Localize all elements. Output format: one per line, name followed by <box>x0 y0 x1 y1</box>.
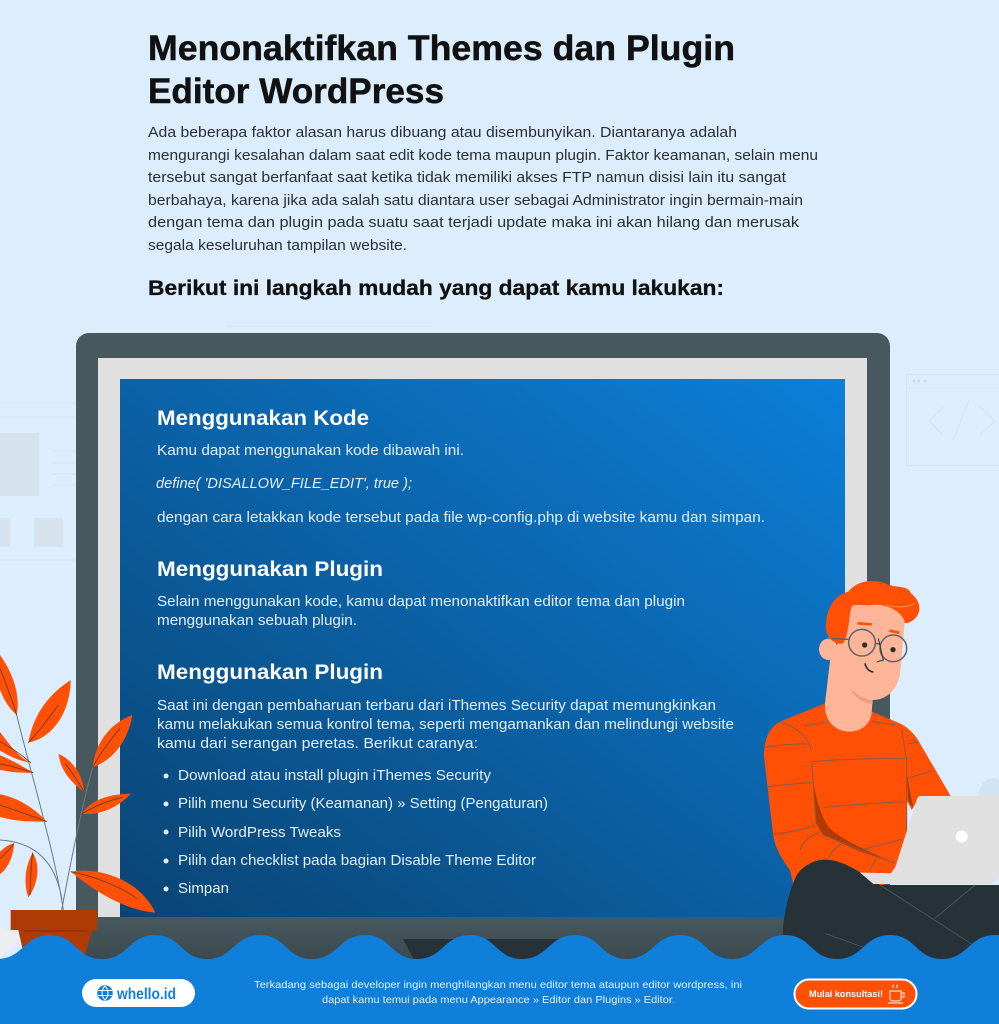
icon: globe <box>98 986 112 1000</box>
section: menggunakan plugin <box>157 558 685 629</box>
intro paragraph: mengurangi kesalahan dalam saat edit kode tema maupun plugin. Faktor keamanan, selain menu <box>148 148 818 164</box>
section: langkah plugin: Menggunakan Plugin <box>157 661 383 684</box>
logo pill <box>82 979 195 1007</box>
bullet list: Pilih WordPress Tweaks <box>178 825 341 841</box>
section: langkah plugin: kamu melakukan semua kontrol tema, seperti mengamankan dan melindungi website <box>157 717 734 733</box>
logo pill: whello.id <box>116 986 176 1003</box>
title <box>148 29 735 111</box>
bullet list <box>164 768 548 897</box>
leaf veins <box>0 668 137 898</box>
laptop <box>860 796 999 884</box>
bullet list: Pilih menu Security (Keamanan) » Setting (Pengaturan) <box>178 796 548 812</box>
monitor <box>76 333 890 967</box>
section: langkah plugin: Saat ini dengan pembaharuan terbaru dari iThemes Security dapat memungkinkan <box>157 698 716 714</box>
footer note <box>254 979 742 1006</box>
glasses and face details <box>832 603 915 672</box>
plant leaves <box>0 655 155 913</box>
background decoration: faint wireframe shapes <box>0 326 999 800</box>
illustration: plant <box>0 655 155 960</box>
section: menggunakan kode <box>156 407 765 526</box>
illustration: man with laptop <box>764 581 999 960</box>
section: menggunakan plugin: menggunakan sebuah plugin. <box>157 613 357 629</box>
footer note: Terkadang sebagai developer ingin menghilangkan menu editor tema ataupun editor wordpress, ini <box>254 979 742 991</box>
pot <box>11 910 97 960</box>
sweater <box>764 703 951 885</box>
bullet list: Download atau install plugin iThemes Security <box>178 768 492 784</box>
section: langkah plugin: kamu dari serangan peretas. Berikut caranya: <box>157 736 478 752</box>
plant stems <box>0 715 93 910</box>
section: menggunakan kode: Kamu dapat menggunakan kode dibawah ini. <box>157 443 464 459</box>
consult button: Mulai konsultasi! <box>809 989 883 999</box>
section: menggunakan plugin: Selain menggunakan kode, kamu dapat menonaktifkan editor tema dan plugin <box>157 594 685 610</box>
intro paragraph <box>148 125 818 254</box>
intro paragraph: tersebut sangat berfanfaat saat ketika tidak memiliki akses FTP namun disisi lain itu sangat <box>148 170 786 186</box>
subheading: Berikut ini langkah mudah yang dapat kamu lakukan: <box>148 277 724 300</box>
footer note: dapat kamu temui pada menu Appearance » Editor dan Plugins » Editor. <box>322 994 675 1006</box>
neck and face <box>819 597 906 732</box>
hair <box>826 581 919 644</box>
icon: coffee cup <box>888 985 904 1003</box>
section: langkah plugin <box>157 661 734 752</box>
intro paragraph: Ada beberapa faktor alasan harus dibuang atau disembunyikan. Diantaranya adalah <box>148 125 737 141</box>
title: Editor WordPress <box>148 72 444 111</box>
intro paragraph: segala keseluruhan tampilan website. <box>148 238 407 254</box>
screen text <box>156 407 765 897</box>
consult button <box>794 980 916 1008</box>
bullet list: Simpan <box>178 881 229 897</box>
footer band <box>0 935 999 1024</box>
section: menggunakan kode: define( 'DISALLOW_FILE_EDIT', true ); <box>156 476 412 492</box>
section: menggunakan kode: dengan cara letakkan kode tersebut pada file wp-config.php di website kamu dan simpan. <box>157 510 765 526</box>
intro paragraph: berbahaya, karena jika ada salah satu diantara user sebagai Administrator ingin bermain-main <box>148 193 803 209</box>
intro paragraph: dengan tema dan plugin pada suatu saat terjadi update maka ini akan hilang dan merusak <box>148 215 800 231</box>
section: menggunakan plugin: Menggunakan Plugin <box>157 558 383 581</box>
bullet list: Pilih dan checklist pada bagian Disable Theme Editor <box>178 853 536 869</box>
legs <box>783 860 999 960</box>
section: menggunakan kode: Menggunakan Kode <box>157 407 369 430</box>
title: Menonaktifkan Themes dan Plugin <box>148 29 735 68</box>
